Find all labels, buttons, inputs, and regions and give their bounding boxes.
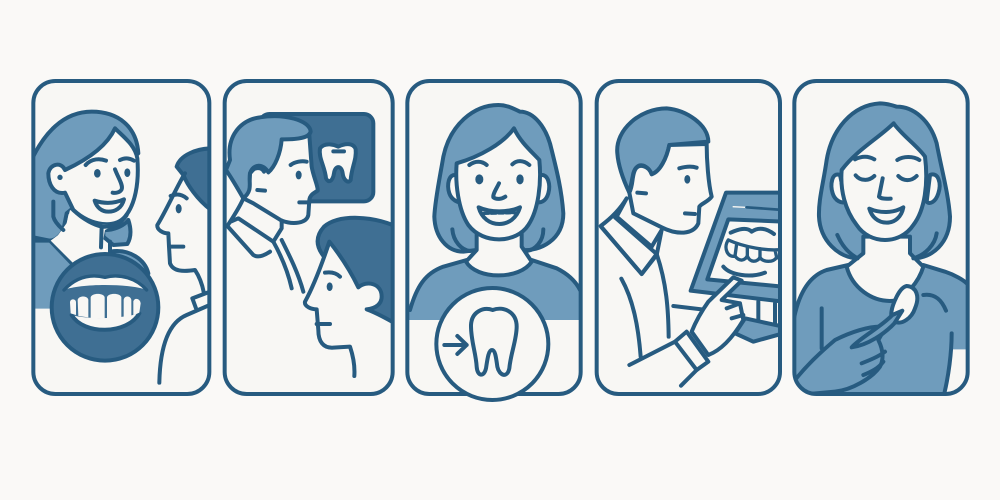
woman's neck <box>847 237 923 301</box>
patient's hair <box>318 218 395 323</box>
hand holding swab <box>795 327 885 395</box>
panels one and two <box>30 81 395 397</box>
swab handle <box>852 311 902 347</box>
panel: woman and patient with smile close-up <box>30 81 213 394</box>
closed eyes <box>856 175 874 180</box>
icon: tooth on screen <box>320 144 356 182</box>
patient's face <box>305 230 395 348</box>
pointing hand <box>692 277 743 355</box>
dentist's collar <box>601 198 662 274</box>
woman's hair bun <box>103 220 130 245</box>
woman's shirt <box>407 260 582 320</box>
smile <box>869 207 903 223</box>
upper lip <box>68 278 144 289</box>
woman's face <box>841 123 926 240</box>
woman's hair <box>819 103 950 258</box>
monitor body <box>691 193 783 302</box>
x-ray screen <box>260 114 373 201</box>
smile with teeth <box>479 207 520 224</box>
dentist's face <box>629 144 712 233</box>
dentist's face <box>243 135 318 223</box>
teeth <box>70 294 141 319</box>
panel five <box>792 81 970 395</box>
arrow <box>444 336 467 354</box>
dentist's hair <box>617 108 708 193</box>
monitor screen with teeth <box>707 219 783 287</box>
woman's ears <box>831 174 846 202</box>
dentist's neck and coat <box>223 198 353 397</box>
patient's collar and shoulder <box>159 303 213 383</box>
tooth circle <box>436 288 548 400</box>
woman's hair <box>434 105 563 252</box>
woman's neck <box>50 210 73 262</box>
panel: relaxed woman holding a swab <box>792 81 970 395</box>
patient's hair <box>177 148 213 212</box>
icon: tooth <box>471 309 517 375</box>
monitor stand <box>758 302 775 327</box>
woman's hair <box>30 112 138 241</box>
patient's face <box>157 173 204 293</box>
dentist's hair <box>226 116 311 198</box>
swab tip <box>891 286 917 323</box>
sleeve cuff <box>675 332 708 370</box>
panel: dentist pointing at monitor <box>597 81 783 394</box>
panel: dentist with x-ray and patient <box>223 81 395 397</box>
woman's face <box>456 128 540 239</box>
woman's shirt <box>35 242 70 309</box>
woman's shirt <box>792 265 970 394</box>
mouth close-up circle <box>52 254 158 361</box>
woman's face <box>48 128 138 224</box>
panels three and four <box>407 81 783 400</box>
panel: smiling woman with tooth icon <box>407 81 582 400</box>
woman's neck <box>466 233 532 275</box>
lower lip <box>74 314 136 328</box>
woman's ears <box>448 175 462 202</box>
illustration: five dental care panels <box>31 79 970 402</box>
